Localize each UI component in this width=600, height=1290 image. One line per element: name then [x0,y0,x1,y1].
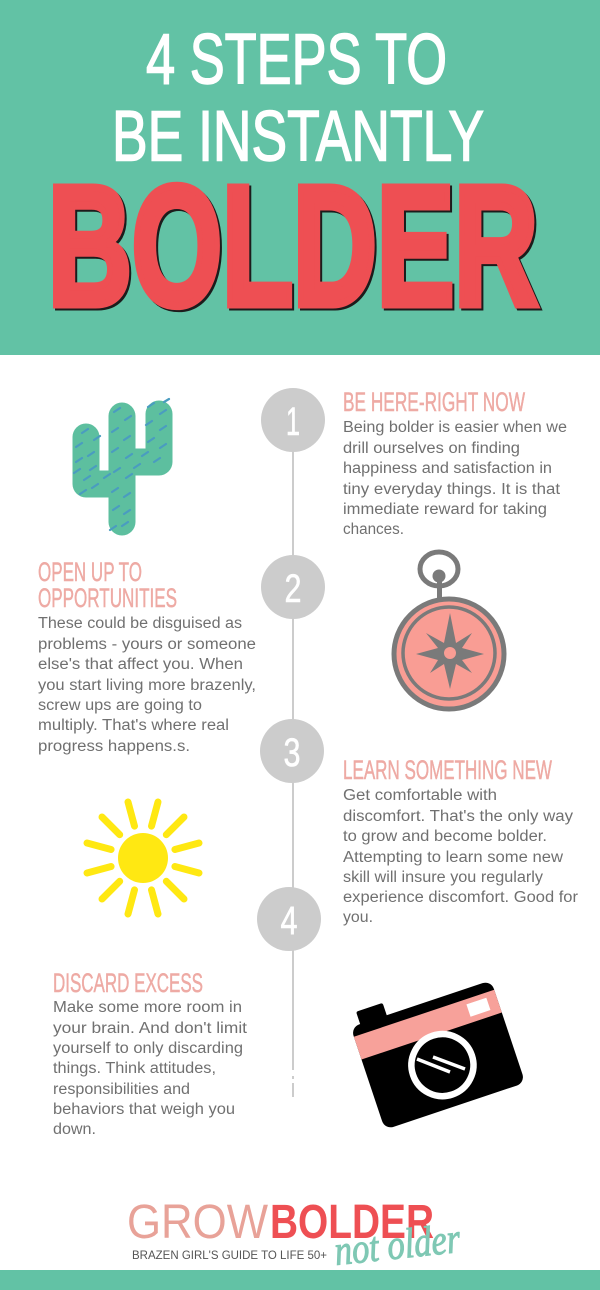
logo: BRAZEN GIRL'S GUIDE TO LIFE 50+ [132,1250,327,1262]
step 2 text: OPEN UP TO [38,557,142,587]
icon: sun [87,802,199,914]
step 3 text: you. [343,909,373,926]
step 4 text [53,968,248,1138]
step 4 badge [257,887,321,951]
icon: compass [394,552,504,709]
step 3 text [343,755,578,926]
step 1 text [343,387,567,538]
step 2 text: you start living more brazenly, [38,677,256,694]
step 4 text: Make some more room in [53,999,242,1016]
step 4 text: responsibilities and [53,1081,190,1098]
step 4 text: behaviors that weigh you [53,1101,235,1118]
step 2 text: OPPORTUNITIES [38,583,177,613]
step 4 badge: 4 [280,899,298,943]
title line 2: BE INSTANTLY [112,98,484,176]
logo: GROW [127,1196,269,1249]
step 3 text: to grow and become bolder. [343,828,547,845]
step 2 text: These could be disguised as [38,615,242,632]
step 1 badge [261,388,325,452]
title line 1: 4 STEPS TO [146,20,447,100]
icon: cactus [74,399,169,530]
logo: not older [332,1216,463,1275]
step 2 text: screw ups are going to [38,697,202,714]
step 1 text: tiny everyday things. It is that [343,481,561,498]
step 2 text: multiply. That's where real [38,717,229,734]
step 4 text: DISCARD EXCESS [53,968,203,998]
step 3 badge: 3 [284,731,300,775]
step 3 text: skill will insure you regularly [343,869,543,886]
step 3 badge [260,719,324,783]
step 3 text: Attempting to learn some new [343,849,564,866]
step 4 text: down. [53,1121,96,1138]
step 2 text: progress happens.s. [38,738,190,755]
footer bar [0,1270,600,1290]
step 4 text: your brain. And don't limit [53,1020,248,1037]
step 4 text: yourself to only discarding [53,1040,243,1057]
step 1 text: immediate reward for taking [343,501,547,518]
icon: camera [347,968,525,1130]
step 4 text: things. Think attitudes, [53,1060,216,1077]
timeline connector [292,440,294,1097]
logo: BOLDER [270,1196,434,1249]
step 1 text: chances. [343,521,404,538]
logo [127,1196,463,1275]
step 1 badge: 1 [286,400,300,444]
step 2 badge [261,555,325,619]
header panel [0,0,600,355]
step 2 text [38,557,256,755]
step 3 text: discomfort. That's the only way [343,808,573,825]
step 1 text: drill ourselves on finding [343,440,520,457]
step 2 text: problems - yours or someone [38,636,256,653]
step 1 text: happiness and satisfaction in [343,460,552,477]
step 3 text: Get comfortable with [343,787,497,804]
step 2 text: else's that affect you. When [38,656,243,673]
step 1 text: Being bolder is easier when we [343,419,567,436]
step 2 badge: 2 [284,567,302,611]
step 3 text: experience discomfort. Good for [343,889,578,906]
